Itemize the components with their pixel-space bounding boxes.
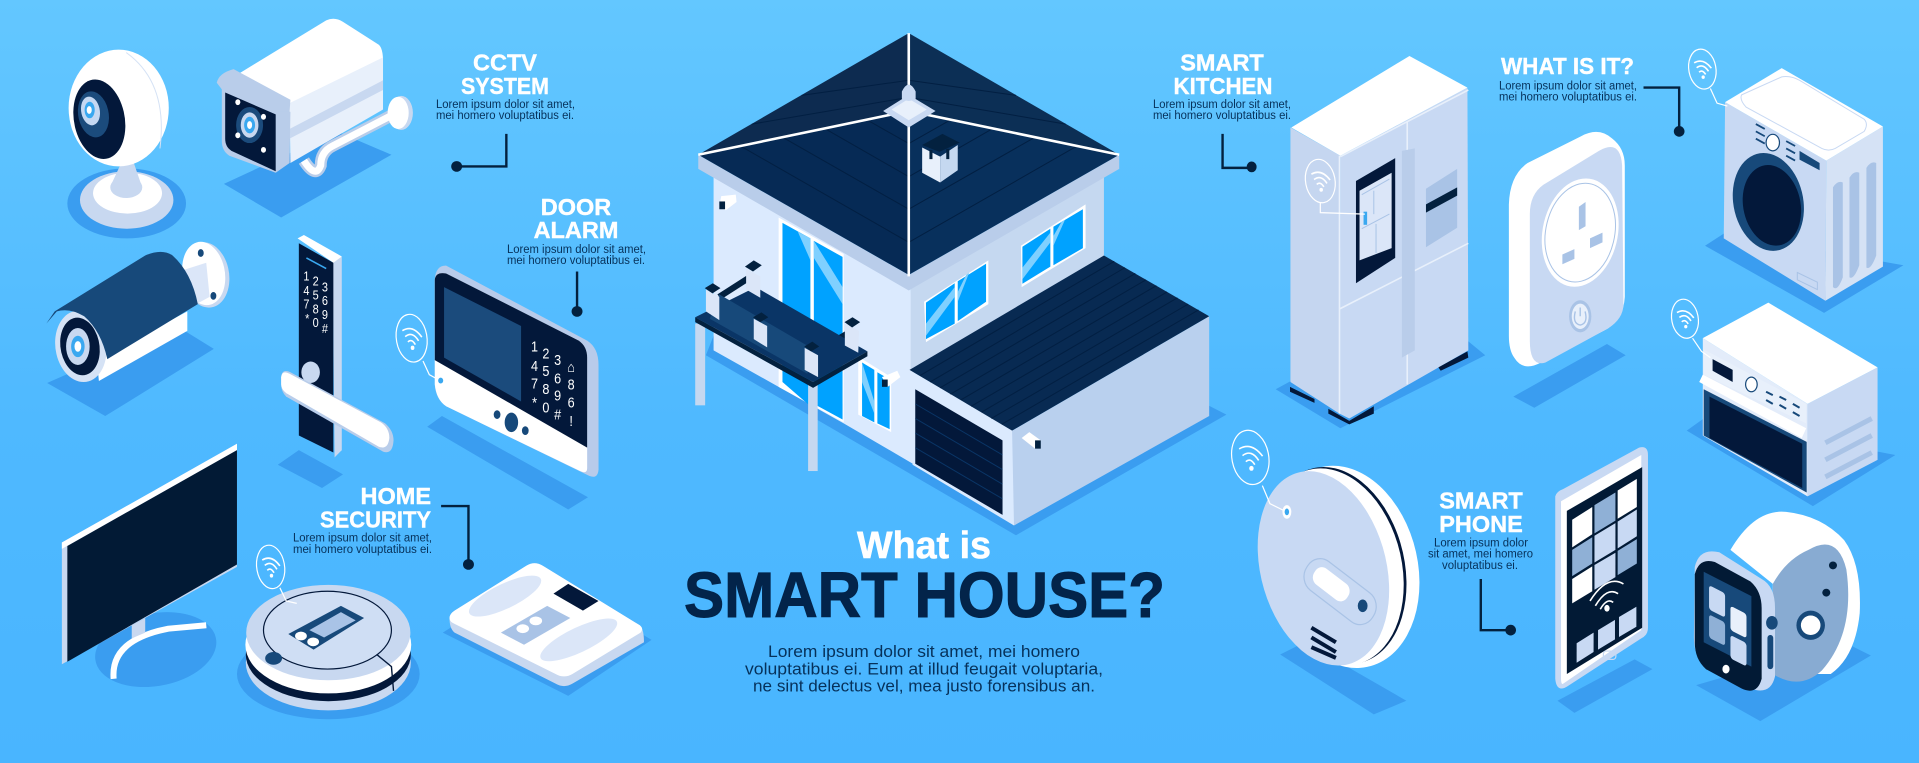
label: home security: SECURITY (320, 506, 431, 532)
description: Lorem ipsum dolor sit amet, mei homero (768, 643, 1080, 661)
label: door alarm: DOOR (541, 194, 611, 220)
label: CCTV system: CCTV (473, 50, 537, 76)
icon: smart door lock: 0 (313, 315, 319, 330)
label: what is it: WHAT IS IT? (1501, 53, 1634, 79)
center house (695, 33, 1257, 535)
icon: door alarm panel: 8 (542, 381, 549, 397)
label: CCTV system: Lorem ipsum dolor sit amet, (436, 99, 575, 111)
icon: smart door lock: * (305, 311, 310, 326)
description: voluptatibus ei. Eum at illud feugait voluptaria, (745, 660, 1103, 678)
icon: door alarm panel: 2 (542, 346, 549, 362)
icon: bullet camera (46, 236, 236, 416)
connector: home security (441, 506, 474, 570)
icon: smart door lock: 9 (322, 307, 328, 322)
connector: CCTV (451, 134, 506, 172)
icon: spherical webcam (66, 50, 186, 238)
roof (698, 33, 1119, 291)
icon: smartwatch (1694, 512, 1871, 721)
label: smart phone: sit amet, mei homero (1428, 549, 1533, 561)
label: what is it: mei homero voluptatibus ei. (1499, 92, 1637, 104)
icon: smart door lock: 7 (303, 297, 309, 312)
label: home security (293, 483, 432, 556)
label: door alarm (507, 194, 646, 267)
connector: smart kitchen (1223, 134, 1257, 172)
icon: smart oven (1668, 296, 1895, 506)
label: CCTV system (436, 50, 575, 122)
upper window B (1021, 204, 1086, 287)
label: smart phone: Lorem ipsum dolor (1434, 538, 1528, 550)
icon: smoke detector (1227, 426, 1443, 714)
icon: smart door lock: 1 (303, 269, 309, 283)
label: smart kitchen (1153, 50, 1291, 122)
label: door alarm: ALARM (534, 217, 618, 243)
icon: door alarm panel: # (554, 407, 562, 423)
icon: smart door lock: 3 (322, 280, 328, 295)
label: home security: HOME (360, 483, 431, 509)
chimney (922, 134, 960, 182)
label: smart phone: PHONE (1439, 511, 1523, 537)
icon: smart door lock: 4 (303, 283, 310, 298)
label: home security: mei homero voluptatibus ei. (293, 544, 432, 556)
garage (910, 255, 1209, 526)
icon: door alarm panel: ⌂ (567, 359, 575, 375)
label: smart phone (1428, 488, 1533, 572)
icon: door alarm panel: ! (569, 413, 573, 429)
label: CCTV system: SYSTEM (461, 73, 549, 99)
description: ne sint delectus vel, mea justo forensibus an. (753, 678, 1095, 696)
upper window A (924, 260, 988, 342)
balcony (695, 260, 867, 471)
icon: door alarm panel: 9 (554, 388, 561, 404)
title: What is (857, 525, 991, 567)
connector: what is it (1644, 88, 1685, 137)
icon: smart fridge (1276, 56, 1485, 428)
small window (858, 357, 891, 432)
label: smart kitchen: mei homero voluptatibus ei. (1153, 110, 1291, 122)
icon: door alarm panel: 5 (542, 363, 549, 379)
mini cameras (719, 195, 1041, 449)
icon: door alarm panel: 6 (554, 371, 561, 387)
icon: washing machine (1685, 46, 1903, 313)
title (684, 525, 1165, 631)
icon: smart door lock: 6 (322, 293, 328, 308)
icon: smart socket (1509, 132, 1629, 408)
icon: door alarm panel: * (532, 394, 538, 410)
title: SMART HOUSE? (684, 559, 1165, 631)
left devices (46, 19, 652, 719)
icon: door alarm panel (392, 266, 599, 509)
connector: smart phone (1481, 579, 1516, 635)
label: smart kitchen: Lorem ipsum dolor sit amet, (1153, 99, 1291, 111)
label: smart kitchen: SMART (1180, 50, 1264, 76)
label: door alarm: Lorem ipsum dolor sit amet, (507, 244, 646, 256)
label: CCTV system: mei homero voluptatibus ei. (436, 110, 574, 122)
big window (779, 218, 844, 422)
icon: smart door lock (278, 235, 394, 488)
icon: door alarm panel: 6 (568, 394, 575, 410)
icon: robot vacuum (237, 542, 420, 719)
icon: smart door lock: 2 (313, 274, 319, 289)
description (745, 643, 1103, 696)
icon: smartphone (1555, 447, 1652, 713)
icon: door alarm panel: 4 (531, 358, 538, 374)
label: home security: Lorem ipsum dolor sit amet, (293, 532, 432, 544)
icon: door alarm panel: 0 (542, 400, 550, 416)
icon: smart door lock: 8 (313, 302, 319, 317)
label: what is it (1499, 53, 1637, 104)
right devices (1227, 46, 1903, 721)
icon: smart door lock: # (322, 321, 328, 336)
icon: box CCTV camera (217, 19, 413, 218)
label: door alarm: mei homero voluptatibus ei. (507, 255, 645, 267)
icon: door alarm panel: 7 (531, 375, 538, 392)
label: smart phone: voluptatibus ei. (1442, 560, 1518, 572)
icon: smart TV (62, 444, 237, 696)
icon: smart scale (443, 563, 652, 696)
label: smart kitchen: KITCHEN (1174, 73, 1272, 99)
label: what is it: Lorem ipsum dolor sit amet, (1499, 80, 1637, 92)
label: smart phone: SMART (1439, 488, 1523, 514)
connector: door alarm (572, 272, 583, 317)
icon: door alarm panel: 3 (554, 352, 561, 368)
icon: door alarm panel: 1 (531, 338, 538, 355)
house illustration (695, 33, 1226, 535)
icon: door alarm panel: 8 (568, 376, 575, 392)
icon: smart door lock: 5 (313, 288, 319, 303)
